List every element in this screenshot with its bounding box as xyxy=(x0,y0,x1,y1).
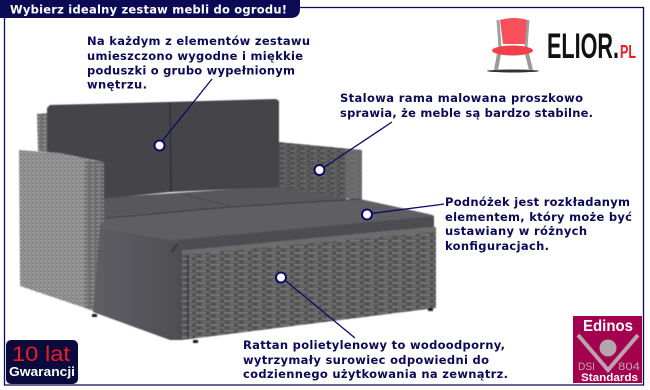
logo: Elior.pl: PL xyxy=(620,42,636,62)
callout text xyxy=(445,195,632,253)
marker xyxy=(362,210,372,220)
product photo: rattan sofa with ottoman xyxy=(19,99,436,343)
badge: Edinos standards xyxy=(573,316,642,384)
marker xyxy=(276,272,286,282)
callout text: elementem, który może być xyxy=(445,210,632,224)
callout text: Na każdym z elementów zestawu xyxy=(87,34,310,48)
badge: 10 year warranty: 10 lat xyxy=(12,343,70,366)
callout text: Podnóżek jest rozkładanym xyxy=(445,195,630,209)
callout: rattan xyxy=(243,272,508,381)
callout: cushions xyxy=(87,34,310,150)
badge: Edinos standards: DSI xyxy=(578,361,595,373)
feet xyxy=(92,308,433,343)
V emblem xyxy=(578,335,638,370)
cushion corner fold xyxy=(172,243,178,252)
callout text: sprawia, że meble są bardzo stabilne. xyxy=(340,106,593,120)
callout: steel frame xyxy=(314,91,593,175)
ottoman rattan front xyxy=(182,227,436,340)
back cushions xyxy=(47,99,279,199)
callout text: umieszczono wygodne i miękkie xyxy=(87,49,303,63)
callout text: konfiguracjach. xyxy=(445,239,549,253)
ottoman cushion lip xyxy=(176,216,434,250)
badge: 10 year warranty: Gwarancji xyxy=(9,364,75,379)
callout text: poduszki o grubo wypełnionym xyxy=(87,64,295,78)
left arm xyxy=(19,150,104,312)
callout text: wnętrzu. xyxy=(87,78,147,92)
callout text: Stalowa rama malowana proszkowo xyxy=(340,91,583,105)
ottoman fabric side xyxy=(93,224,186,340)
callout text: wytrzymały surowiec odpowiedni do xyxy=(243,353,489,367)
icon: red chair xyxy=(487,18,539,72)
seat cushions xyxy=(100,186,346,224)
badge: Edinos standards: Edinos xyxy=(583,318,633,335)
title banner: Wybierz idealny zestaw mebli do ogrodu! xyxy=(10,2,287,16)
leader line xyxy=(320,122,392,170)
callout text: codziennego użytkowania na zewnątrz. xyxy=(243,367,508,381)
leader line xyxy=(281,277,355,338)
badge: 10 year warranty xyxy=(6,340,78,384)
callout text xyxy=(340,91,593,120)
logo: Elior.pl xyxy=(487,18,636,72)
callout text: Rattan polietylenowy to wodoodporny, xyxy=(243,338,505,352)
leader line xyxy=(367,204,444,214)
right arm rattan xyxy=(279,142,362,200)
callout text xyxy=(243,338,508,381)
badge: Edinos standards: Standards xyxy=(581,372,638,384)
marker xyxy=(314,165,324,175)
callout text: ustawiany w różnych xyxy=(445,224,587,238)
marker xyxy=(154,140,164,150)
badge: Edinos standards: 804 xyxy=(618,361,640,373)
leader line xyxy=(159,79,212,145)
ottoman cushion top xyxy=(100,199,434,250)
callout text xyxy=(87,34,310,92)
callout: footrest xyxy=(362,195,632,253)
back left rattan xyxy=(37,113,47,152)
